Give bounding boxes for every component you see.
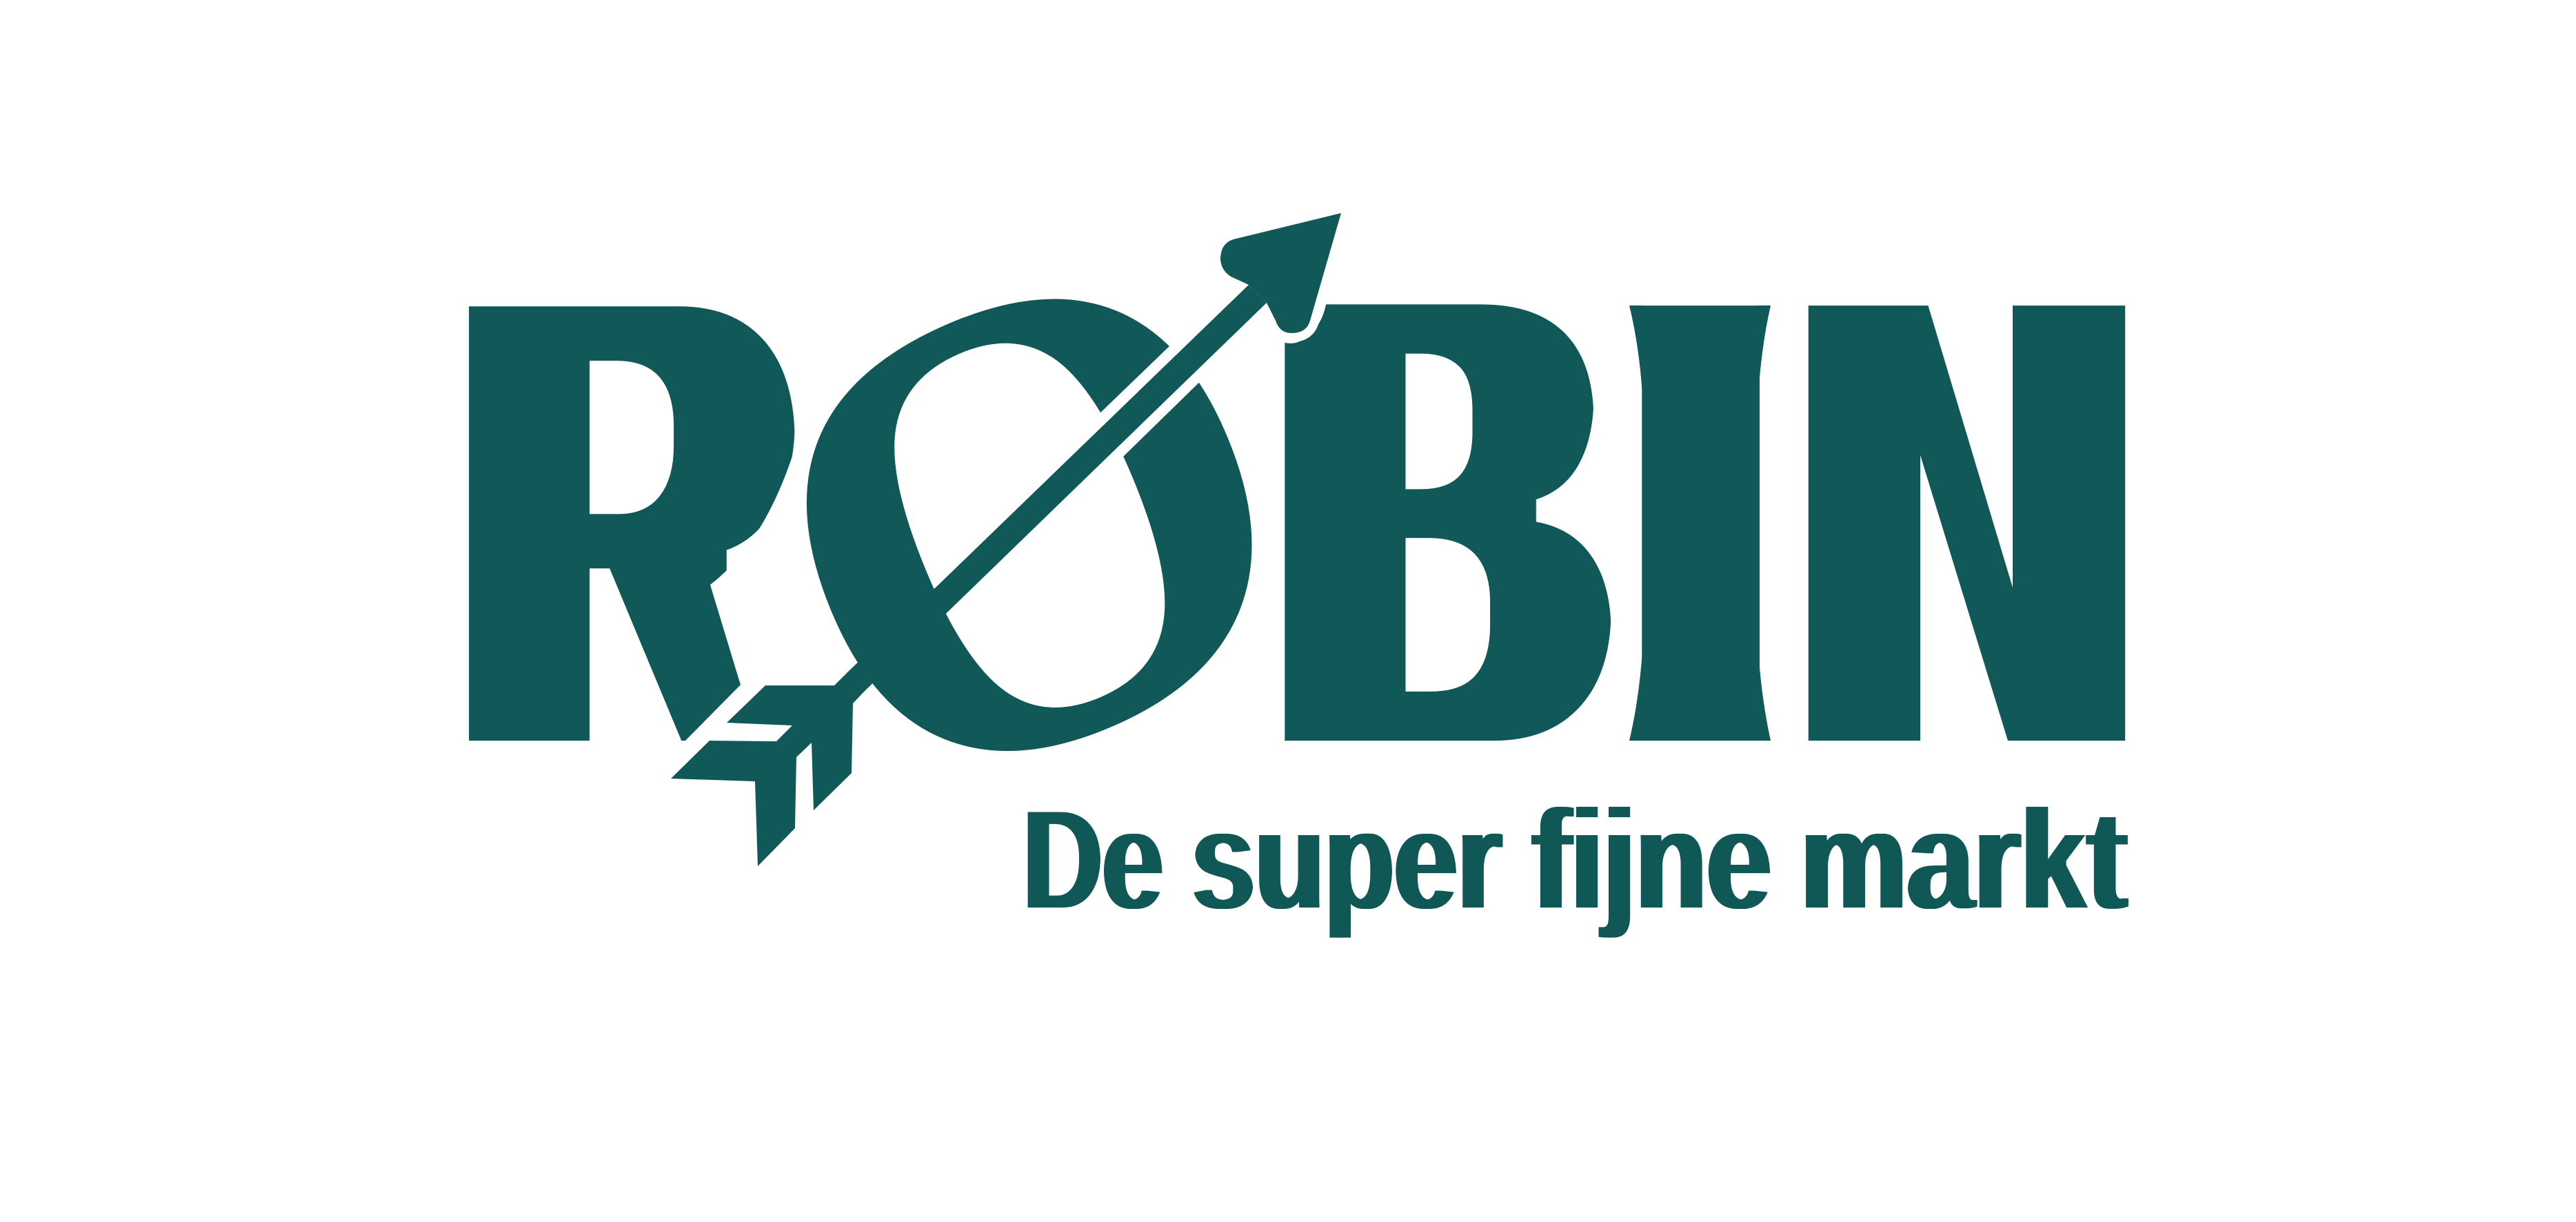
letter B: B xyxy=(1284,148,1602,893)
tagline xyxy=(1023,779,2127,941)
letter R: R xyxy=(467,154,792,890)
arrow shaft and fletching xyxy=(671,285,1267,866)
letter O: O xyxy=(663,90,1391,949)
tagline: markt xyxy=(1800,779,2127,941)
arrowhead xyxy=(1220,213,1341,333)
tagline: fijne xyxy=(1532,779,1771,941)
letter I: I xyxy=(1587,168,1814,875)
icon: arrow through the O xyxy=(671,213,1341,866)
letter N: N xyxy=(1808,169,2126,875)
tagline: De xyxy=(1023,779,1163,941)
tagline: super xyxy=(1191,779,1502,941)
wordmark: ROBIN xyxy=(467,90,2126,949)
